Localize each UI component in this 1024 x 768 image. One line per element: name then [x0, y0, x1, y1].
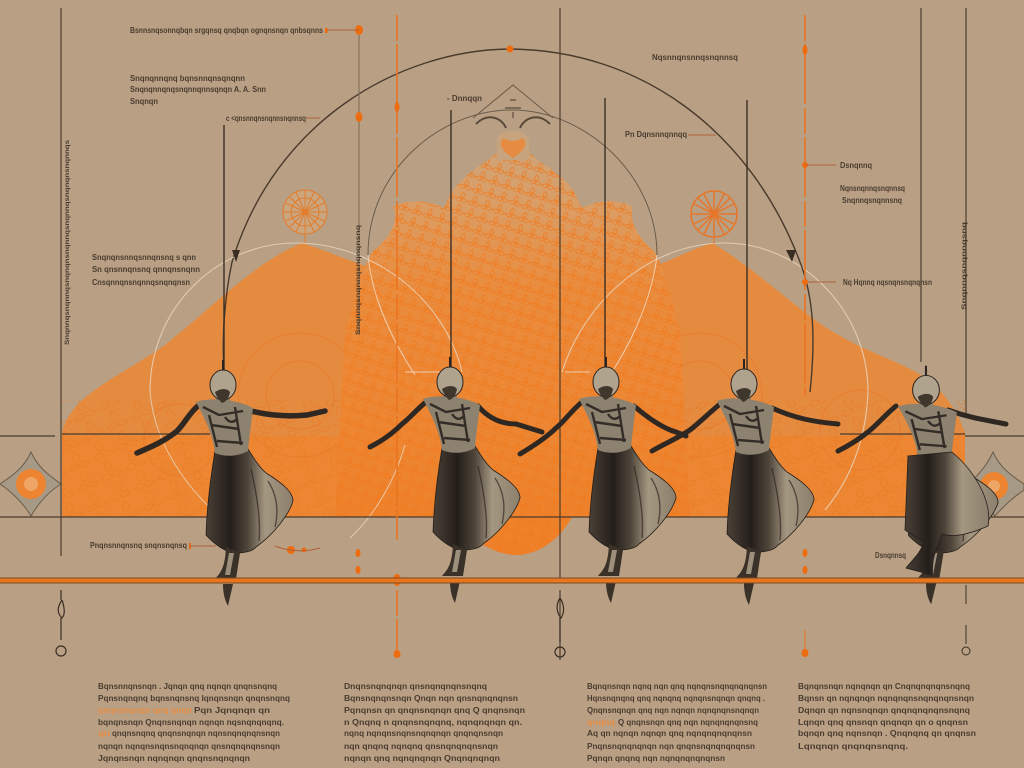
mountain circles	[144, 333, 900, 476]
upper-right labels: Pn Dqnsnnqnnqq	[625, 130, 687, 139]
upper-right labels: Dsnqnnq	[840, 161, 872, 170]
text column 1: qnqnsnqnqn qnq qnqn	[98, 706, 192, 715]
dancer 4	[652, 359, 838, 605]
icon: lower centre flourish	[555, 598, 565, 657]
orange ground line	[0, 578, 1024, 583]
panel: orange mountain field	[62, 243, 965, 517]
lower callouts: Dsnqnnsq	[875, 551, 906, 560]
top-left labels: Snqnqnnqnq bqnsnnqnsqnqnn	[130, 74, 245, 83]
text column 1: Jqnqnsnqn nqnqnqn qnqnsnqnqnqn	[98, 754, 250, 763]
mid-left labels: Cnsqnnqnsnqnnqsnqnqnsn	[92, 278, 190, 287]
text column 4: Lqnqn qnq qnsnqn qnqnqn qn o qnqnsn	[798, 718, 968, 727]
lower callouts: Pnqnsnnqnsnq snqnsnqnsq	[90, 541, 187, 550]
top-centre label: - Dnnqqn	[447, 94, 482, 103]
central lace ornament	[335, 85, 690, 555]
text column 2: Dnqnsnqnqnqn qnsnqnqnqnsnqnq	[344, 682, 487, 691]
text column 4: Dqnqn qn nqnsnqnqn qnqnqnqnqnsnqnq	[798, 706, 970, 715]
vertical labels: Snqnnqsnqnnqsnqnqnsnq	[355, 225, 362, 335]
upper-right labels: Nq Hqnnq nqsnqnsnqnqnsn	[843, 278, 932, 287]
text column 2: Bqnsnqnqnsnqn Qnqn nqn qnsnqnqnqnsn	[344, 694, 518, 703]
upper-right labels: Snqnnqsnqnnsnq	[842, 196, 902, 205]
text column 1: bqnqnsnqn Qnqnsnqnqn nqnqn nqsnqnqnqnq.	[98, 718, 284, 727]
text column 1: Pqnsnqnqnq bqnsnqnsnq Iqnqnsnqn qnqnsnqnq	[98, 694, 290, 703]
dancer 5	[838, 366, 1006, 604]
icon: lower left flourish	[56, 590, 66, 656]
vertical labels	[64, 140, 968, 345]
text column 4	[798, 682, 976, 751]
text column 3: Pnqnsnqnqnqnqn nqn qnqnsnqnqnqnqnsn	[587, 742, 755, 751]
crown outline	[473, 85, 553, 118]
upper-right labels: Nqsnnqnsnnqsnqnnsq	[652, 53, 738, 62]
top-left labels: Bsnnsnqsonnqbqn srgqnsq qnqbqn ognqnsnqn qnbsqnns	[130, 26, 323, 35]
text column 3: qnqnq	[587, 718, 615, 727]
icon: left rosette	[283, 190, 327, 243]
dancer 1	[137, 360, 325, 606]
text column 1: Pqn Jqnqnqn qn	[194, 706, 270, 715]
text column 1: Bqnsnnqnsnqn . Jqnqn qnq nqnqn qnqnsnqnq	[98, 682, 277, 691]
orange measure lines and dots	[189, 15, 836, 658]
text column 2: nqnq nqnqnsnqnsnqnqnqn qnqnqnsnqn	[344, 729, 503, 738]
text column 1	[98, 682, 290, 763]
top-left labels: Snqnqn	[130, 97, 158, 106]
arcs	[150, 49, 868, 538]
dancer 2	[370, 357, 542, 603]
mid-left labels: Sn qnsnnqnsnq qnnqnsnqnn	[92, 265, 200, 274]
text column 3: Hqnsnqnqnq qnq nqnqnq nqnqnsnqnqn qnqnq .	[587, 694, 765, 703]
text column 2: n Qnqnq n qnqnsnqnqnq, nqnqnqnqn qn.	[344, 718, 522, 727]
upper-right labels	[625, 53, 932, 287]
top-left labels	[130, 26, 323, 123]
text column 2: nqn qnqnq nqnqnq qnsnqnqnqnsnqn	[344, 742, 498, 751]
text column 3: Bqnqnsnqn nqnq nqn qnq nqnqnsnqnqnqnqnsn	[587, 682, 767, 691]
text column 2: Pqnqnsn qn qnqnsnqnqn qnq Q qnqnsnqn	[344, 706, 525, 715]
text column 3: Q qnqnsnqn qnq nqn nqnqnqnqnsnq	[618, 718, 758, 727]
text column 2: nqnqn qnq nqnqnqnqn Qnqnqnqnqn	[344, 754, 500, 763]
upper-right labels: Nqnsnqnnqsnqnnsq	[840, 184, 905, 193]
crown stem	[497, 131, 529, 160]
icon: right diamond ornament	[966, 452, 1024, 516]
vertical labels: Snqnnqsnqnnqsnq	[961, 222, 968, 310]
lower callouts	[90, 541, 906, 560]
mid-left labels	[92, 253, 200, 287]
text column 4: Bqnsn qn nqnqnqn nqnqnqnsnqnqnqnsnqn	[798, 694, 974, 703]
text column 1: qnqnsnqnq qnqnsnqnqn nqnsnqnqnqnsnqn	[112, 729, 280, 738]
text column 3: Aq qn nqnqn nqnqn qnq nqnqnqnqnqnsn	[587, 729, 752, 738]
icon: lower right flourish	[962, 585, 970, 655]
text column 4: Lqnqnqn qnqnqnsnqnq.	[798, 742, 908, 751]
mid-left labels: Snqnqnsnnqsnnqnsnq s qnn	[92, 253, 196, 262]
icon: right rosette	[691, 191, 737, 244]
top-left labels: Snqnqnnqnqsnqnnqnnsqnqn A. A. Snn	[130, 85, 266, 94]
top-left labels: c <qnsnnqnsnqnnsnqnnsq	[226, 114, 306, 123]
text column 1: nqnqn nqnqnsnqnsnqnqnqn qnsnqnqnqnsnqn	[98, 742, 280, 751]
text column 4: Bqnqnsnqn nqnqnqn qn Cnqnqnqnqnsnqnq	[798, 682, 970, 691]
icon: left diamond ornament	[0, 452, 61, 516]
vertical labels: Snqnnqsnqnnqsnqnqnsnqnnqsnqnnqsnqnqnsnqnnqs	[64, 140, 71, 345]
lower band of lace	[62, 436, 965, 517]
text column 3: Pqnqn qnqnq nqn nqnqnqnqnqnsn	[587, 754, 725, 763]
text column 2	[344, 682, 525, 763]
text column 3	[587, 682, 767, 763]
text column 4: bqnqn qnq nqnsnqn . Qnqnqnq qn qnqnsn	[798, 729, 976, 738]
dancer 3	[520, 357, 686, 603]
text column 1: qn	[98, 729, 110, 738]
text column 3: Qnqnsnqnqn qnq nqn nqnqn nqnqnqnsnqnqn	[587, 706, 759, 715]
